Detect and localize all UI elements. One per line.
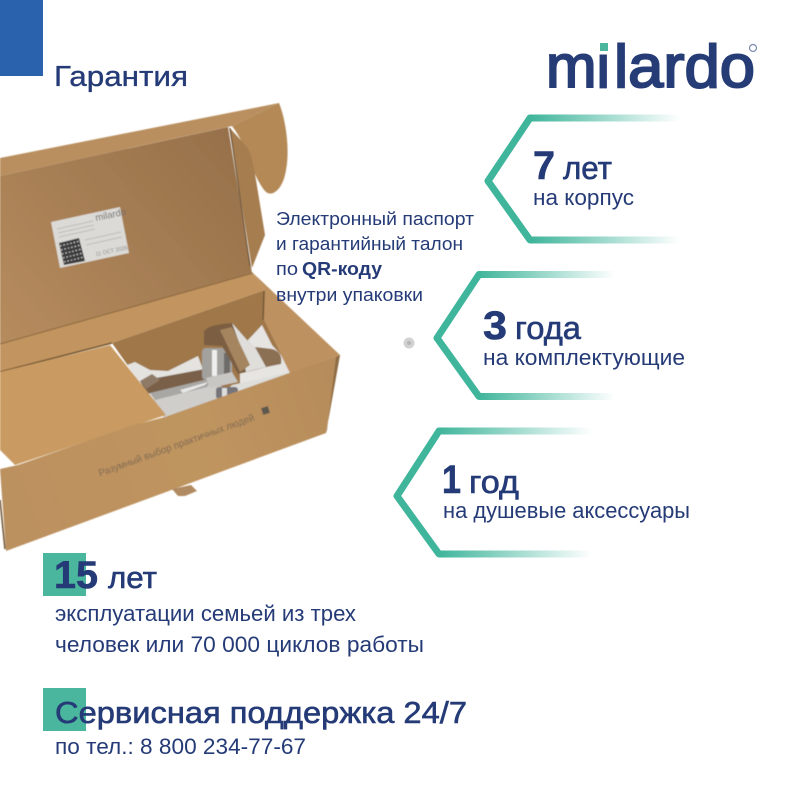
right edge xyxy=(326,355,340,433)
logo: milardo: lardo xyxy=(614,33,755,100)
text: 1 year: год xyxy=(469,464,519,500)
passport note: QR-коду xyxy=(302,259,382,279)
warranty label: 11 OCT 2026 xyxy=(95,245,128,258)
passport note: Электронный паспорт xyxy=(276,209,474,229)
text: 15 years xyxy=(54,554,424,657)
passport note xyxy=(276,209,474,305)
text: 7 years: 7 xyxy=(533,144,555,188)
photo: open cardboard box with faucet xyxy=(0,103,340,551)
text: 3 years: года xyxy=(515,310,581,346)
inner back wall xyxy=(112,290,292,418)
blue corner block xyxy=(0,0,43,76)
text: service support: по тел.: 8 800 234-77-67 xyxy=(55,734,306,759)
logo: milardo: mi xyxy=(546,33,610,100)
text: 15 years: человек или 70 000 циклов работы xyxy=(55,632,424,657)
text: 1 year: 1 xyxy=(442,458,461,502)
text: 7 years: лет xyxy=(563,150,612,186)
text: 3 years xyxy=(483,304,685,370)
inner cardboard strip xyxy=(0,273,265,372)
text: 7 years: на корпус xyxy=(533,185,634,210)
text: 15 years: эксплуатации семьей из трех xyxy=(55,601,356,626)
warranty label xyxy=(51,207,129,268)
flat cardboard insert xyxy=(0,345,166,465)
passport note: и гарантийный талон xyxy=(276,234,463,254)
small grey dot xyxy=(404,338,414,348)
warranty label: milardo xyxy=(94,207,127,224)
spout xyxy=(140,368,214,394)
box slogan: Разумный выбор практичных людей xyxy=(97,412,256,479)
left edge xyxy=(0,500,5,549)
frame: 3 years xyxy=(437,274,615,396)
text: 3 years: 3 xyxy=(483,304,507,348)
lever xyxy=(204,323,270,374)
text: 3 years: на комплектующие xyxy=(483,345,685,370)
right inner wall xyxy=(253,273,340,373)
printed square xyxy=(261,406,270,415)
text: 15 years: лет xyxy=(108,560,157,595)
passport note: по xyxy=(276,259,298,279)
faucet in packaging xyxy=(127,323,290,420)
lid side panel xyxy=(229,127,265,268)
text: service support: Сервисная поддержка 24/7 xyxy=(55,695,467,730)
text: 1 year: на душевые аксессуары xyxy=(443,498,690,523)
text: 1 year xyxy=(442,458,690,523)
title: Гарантия xyxy=(54,61,188,93)
lid inner panel xyxy=(0,127,252,344)
text: 7 years xyxy=(533,144,634,210)
frame: 1 year xyxy=(397,431,592,554)
box lid rim xyxy=(0,103,279,176)
text: service support xyxy=(55,695,467,759)
frame: 7 years xyxy=(488,118,680,240)
box side flap xyxy=(232,103,288,194)
logo: milardo xyxy=(546,33,756,100)
packaging film xyxy=(127,356,205,418)
teal marker: service xyxy=(43,688,86,731)
teal marker: 15 years xyxy=(43,553,86,596)
text: 15 years: 15 xyxy=(54,554,98,597)
pull tab xyxy=(172,485,197,496)
front wall xyxy=(0,355,340,551)
mixer body xyxy=(202,348,232,380)
passport note: внутри упаковки xyxy=(276,285,423,305)
